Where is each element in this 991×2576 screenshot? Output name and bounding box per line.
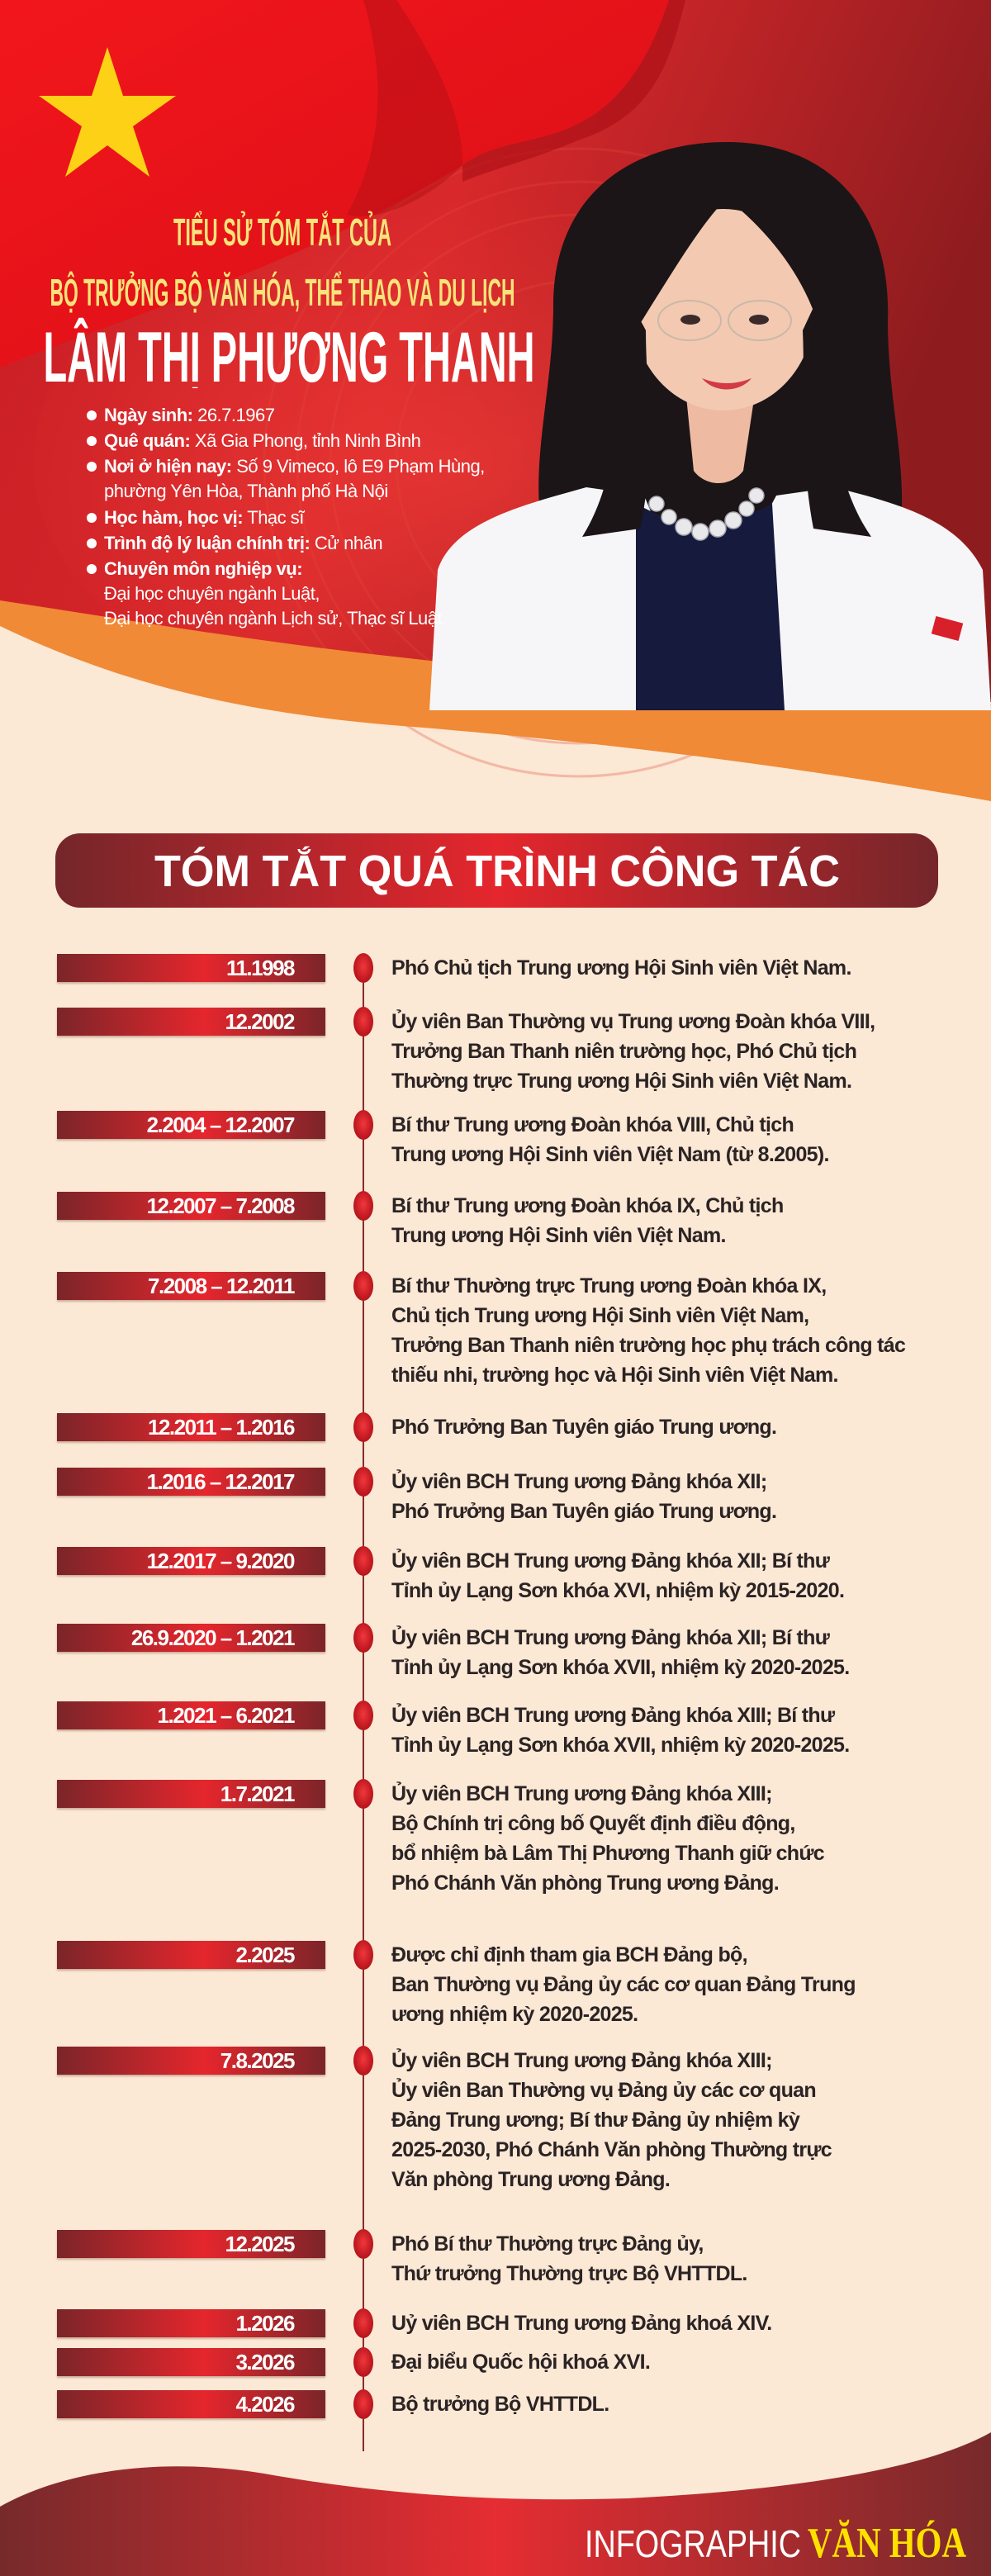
timeline: Ủy viên BCH Trung ương Đảng khóa XII; Bí thư (391, 1626, 829, 1649)
entry 1.2026 (56, 2308, 772, 2340)
timeline: 12.2011 – 1.2016 (148, 1415, 294, 1440)
personal info bullets: Nơi ở hiện nay: Số 9 Vimeco, lô E9 Phạm Hùng, (104, 456, 485, 477)
orange wave (0, 600, 991, 801)
timeline: 2.2025 (235, 1943, 294, 1967)
timeline: Bí thư Thường trực Trung ương Đoàn khóa IX, (391, 1274, 826, 1297)
entry 2016-2017 (56, 1467, 776, 1523)
timeline: 11.1998 (226, 956, 294, 980)
footer: INFOGRAPHIC (585, 2522, 801, 2565)
timeline: Trung ương Hội Sinh viên Việt Nam. (391, 1224, 726, 1247)
timeline: Thường trực Trung ương Hội Sinh viên Việt Nam. (391, 1070, 851, 1093)
timeline: Ủy viên BCH Trung ương Đảng khóa XIII; (391, 2049, 772, 2072)
timeline: thiếu nhi, trường học và Hội Sinh viên Việt Nam. (391, 1364, 838, 1387)
entry 12.2025 (56, 2229, 747, 2285)
timeline: Trưởng Ban Thanh niên trường học, Phó Chủ tịch (391, 1040, 856, 1063)
timeline: Ủy viên BCH Trung ương Đảng khóa XIII; Bí thư (391, 1704, 834, 1727)
timeline: Tỉnh ủy Lạng Sơn khóa XVII, nhiệm kỳ 2020-2025. (391, 1656, 850, 1679)
timeline: ương nhiệm kỳ 2020-2025. (391, 2003, 638, 2026)
timeline: Tỉnh ủy Lạng Sơn khóa XVI, nhiệm kỳ 2015-2020. (391, 1579, 844, 1602)
timeline: 1.7.2021 (220, 1781, 294, 1806)
timeline: 26.9.2020 – 1.2021 (131, 1625, 294, 1650)
timeline: Ủy viên Ban Thường vụ Trung ương Đoàn khóa VIII, (391, 1010, 875, 1033)
timeline: Trung ương Hội Sinh viên Việt Nam (từ 8.2005). (391, 1143, 829, 1166)
personal info bullets: Trình độ lý luận chính trị: Cử nhân (104, 533, 382, 553)
title (43, 211, 535, 388)
section heading (55, 833, 938, 908)
timeline: Đại biểu Quốc hội khoá XVI. (391, 2351, 650, 2374)
timeline: 12.2007 – 7.2008 (147, 1193, 294, 1218)
timeline: 2.2004 – 12.2007 (147, 1112, 294, 1137)
flag (0, 0, 669, 368)
hero background (0, 0, 991, 801)
timeline: Bộ Chính trị công bố Quyết định điều động, (391, 1812, 795, 1835)
entry 2.2025 (56, 1940, 856, 2026)
timeline: Ủy viên BCH Trung ương Đảng khóa XII; (391, 1470, 766, 1493)
timeline: Thứ trưởng Thường trực Bộ VHTTDL. (391, 2262, 747, 2285)
timeline: 4.2026 (235, 2392, 294, 2417)
timeline: Ủy viên BCH Trung ương Đảng khóa XII; Bí thư (391, 1549, 829, 1573)
timeline: Tỉnh ủy Lạng Sơn khóa XVII, nhiệm kỳ 2020-2025. (391, 1734, 850, 1757)
entry 2021 (56, 1701, 850, 1757)
timeline: Được chỉ định tham gia BCH Đảng bộ, (391, 1943, 747, 1966)
footer (0, 2432, 991, 2576)
entry 2007-2008 (56, 1191, 784, 1247)
timeline: 1.2021 – 6.2021 (158, 1703, 294, 1728)
entry 2017-2020 (56, 1546, 844, 1602)
section heading: TÓM TẮT QUÁ TRÌNH CÔNG TÁC (154, 846, 840, 896)
timeline: Văn phòng Trung ương Đảng. (391, 2168, 670, 2191)
timeline: Bộ trưởng Bộ VHTTDL. (391, 2393, 609, 2416)
timeline line (363, 958, 364, 2451)
timeline: Chủ tịch Trung ương Hội Sinh viên Việt Nam, (391, 1304, 808, 1327)
personal info bullets: Học hàm, học vị: Thạc sĩ (104, 507, 304, 528)
entry 1.7.2021 (56, 1779, 824, 1895)
entry 11.1998 (56, 953, 851, 984)
timeline: Ban Thường vụ Đảng ủy các cơ quan Đảng Trung (391, 1973, 856, 1996)
entry 2004-2007 (56, 1110, 829, 1166)
timeline: Phó Trưởng Ban Tuyên giáo Trung ương. (391, 1500, 776, 1523)
timeline (56, 953, 905, 2421)
timeline: Trưởng Ban Thanh niên trường học phụ trách công tác (391, 1334, 905, 1357)
personal info bullets: Đại học chuyên ngành Luật, (104, 583, 320, 604)
personal info bullets: Chuyên môn nghiệp vụ: (104, 558, 302, 579)
personal info bullets: phường Yên Hòa, Thành phố Hà Nội (104, 481, 388, 501)
timeline: 12.2017 – 9.2020 (147, 1549, 294, 1573)
entry 3.2026 (56, 2347, 650, 2379)
entry 2020-2021 (56, 1623, 850, 1679)
timeline: 3.2026 (235, 2350, 294, 2374)
personal info bullets (87, 405, 485, 629)
timeline: Phó Bí thư Thường trực Đảng ủy, (391, 2232, 704, 2256)
timeline: 2025-2030, Phó Chánh Văn phòng Thường trực (391, 2138, 832, 2161)
personal info bullets: Quê quán: Xã Gia Phong, tỉnh Ninh Bình (104, 430, 420, 451)
timeline: Đảng Trung ương; Bí thư Đảng ủy nhiệm kỳ (391, 2109, 799, 2132)
entry 2008-2011 (56, 1271, 905, 1387)
timeline: 1.2026 (235, 2311, 294, 2336)
timeline: bổ nhiệm bà Lâm Thị Phương Thanh giữ chức (391, 1842, 824, 1865)
entry 4.2026 (56, 2389, 609, 2421)
timeline: Ủy viên Ban Thường vụ Đảng ủy các cơ quan (391, 2079, 816, 2102)
timeline: Ủy viên BCH Trung ương Đảng khóa XIII; (391, 1782, 772, 1805)
timeline: 7.2008 – 12.2011 (148, 1274, 294, 1298)
timeline: Phó Chánh Văn phòng Trung ương Đảng. (391, 1872, 779, 1895)
timeline: 12.2025 (225, 2232, 294, 2256)
portrait (429, 142, 991, 710)
entry 7.8.2025 (56, 2046, 832, 2191)
timeline: Phó Chủ tịch Trung ương Hội Sinh viên Việt Nam. (391, 956, 851, 980)
personal info bullets: Đại học chuyên ngành Lịch sử, Thạc sĩ Luật (104, 608, 442, 629)
timeline: Uỷ viên BCH Trung ương Đảng khoá XIV. (391, 2312, 772, 2335)
timeline: Bí thư Trung ương Đoàn khóa VIII, Chủ tịch (391, 1113, 794, 1136)
timeline: 7.8.2025 (220, 2048, 294, 2073)
entry 12.2002 (56, 1007, 875, 1093)
entry 2011-2016 (56, 1412, 776, 1444)
personal info bullets: Ngày sinh: 26.7.1967 (104, 405, 274, 425)
timeline: Bí thư Trung ương Đoàn khóa IX, Chủ tịch (391, 1194, 784, 1217)
timeline: 1.2016 – 12.2017 (147, 1469, 294, 1494)
timeline: Phó Trưởng Ban Tuyên giáo Trung ương. (391, 1416, 776, 1439)
timeline: 12.2002 (225, 1009, 294, 1034)
